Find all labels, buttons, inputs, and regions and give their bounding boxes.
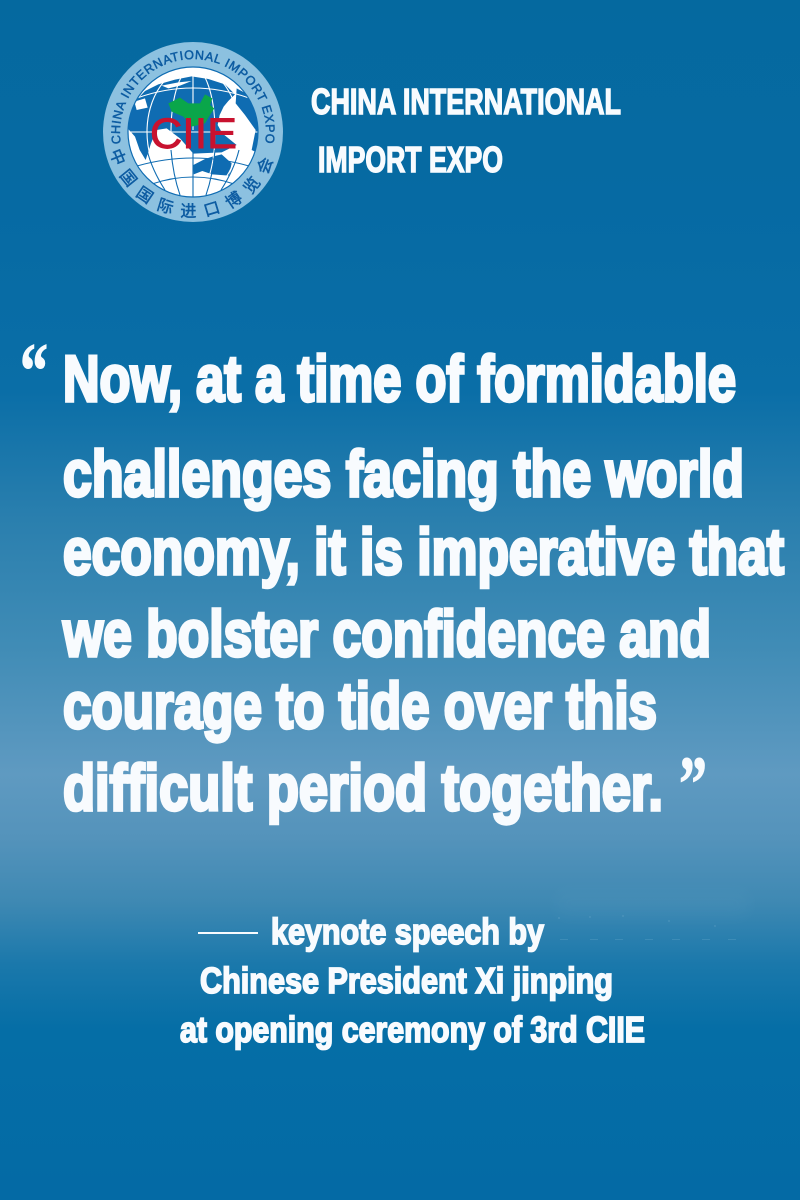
logo ring text: Chinese: 中国国际进口博览会 <box>110 148 274 218</box>
closing quotation mark: ” <box>679 740 707 827</box>
logo outer ring <box>103 42 283 222</box>
header title <box>311 81 621 180</box>
opening quotation mark: “ <box>20 327 48 414</box>
attribution line 2: Chinese President Xi jinping <box>200 960 613 1001</box>
header line 1: CHINA INTERNATIONAL <box>311 81 621 122</box>
faint ghost watermark <box>555 890 750 940</box>
logo: China in green <box>168 94 214 127</box>
logo globe grid lines <box>130 76 258 176</box>
main quote <box>62 342 784 824</box>
quote line 5: courage to tide over this <box>63 669 657 742</box>
attribution dash <box>198 932 258 934</box>
quote line 6: difficult period together. <box>63 751 663 824</box>
attribution line 3: at opening ceremony of 3rd CIIE <box>180 1009 645 1050</box>
header line 2: IMPORT EXPO <box>318 139 503 180</box>
logo ring text: English: CHINA INTERNATIONAL IMPORT EXPO <box>111 50 275 144</box>
logo wordmark CIIE: CIIE <box>150 110 237 158</box>
attribution <box>180 911 645 1050</box>
attribution line 1: keynote speech by <box>271 911 544 952</box>
logo: CIIE globe emblem <box>103 42 283 222</box>
logo globe <box>128 67 258 197</box>
